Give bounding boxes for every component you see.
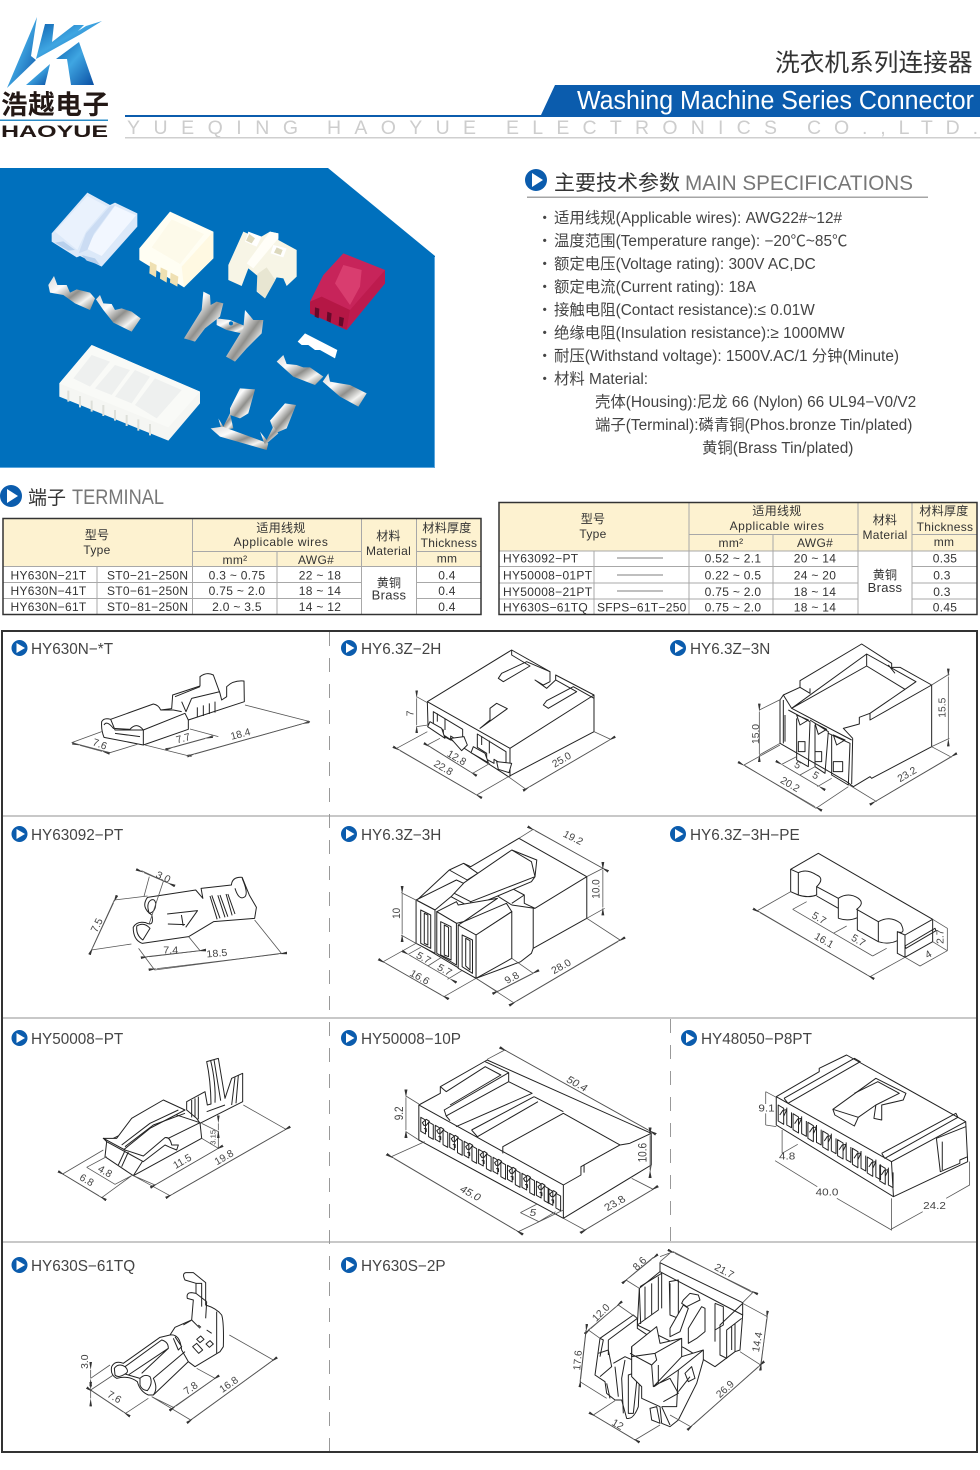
- drawing: three-way housing with dimensions: 5: [810, 770, 821, 782]
- drawing: three-way housing with dimensions: [744, 644, 952, 808]
- panel: HY6.3Z-3H-PE: [660, 818, 976, 1017]
- icon: play bullet: [12, 1257, 28, 1273]
- product photo panel: [0, 168, 435, 468]
- photo: white small bar: [298, 333, 337, 358]
- table: right terminal specifications: 0.52 ~ 2.1: [705, 552, 761, 566]
- specifications list: [537, 209, 916, 457]
- table: left terminal specifications: 22 ~ 18: [299, 568, 341, 582]
- table: right terminal specifications: 20 ~ 14: [794, 552, 836, 566]
- table: right terminal specifications: Type: [579, 527, 607, 541]
- table: right terminal specifications: 材料厚度: [919, 503, 969, 518]
- table: left terminal specifications: 0.4: [438, 584, 456, 598]
- table: left terminal specifications: 14 ~ 12: [299, 600, 341, 614]
- drawing: two-way latch housing with dimensions: [572, 1252, 767, 1440]
- table: left terminal specifications: ST0−81−250N: [107, 600, 188, 614]
- photo: white latch housing: [228, 232, 297, 298]
- table: right terminal specifications: mm: [934, 535, 954, 549]
- panel: HY6.3Z-3H: [330, 818, 656, 1017]
- part label: HY50008−PT: [31, 1031, 123, 1048]
- drawings grid frame: [2, 631, 977, 1452]
- specifications list: 额定电流(Current rating): 18A: [554, 278, 757, 296]
- drawing: cover strip with dimensions: 2.7: [936, 929, 947, 944]
- drawing: three-way housing with dimensions: 20.2: [778, 775, 801, 795]
- drawing: two-way latch housing with dimensions: 21.7: [712, 1262, 736, 1281]
- table: left terminal specifications: 0.3 ~ 0.75: [209, 568, 265, 582]
- company name strip: HAOYUE: [327, 117, 476, 139]
- table: left terminal specifications: HY630N−61T: [10, 600, 87, 614]
- drawing: three-way housing with dimensions: 15.5: [937, 697, 948, 718]
- icon: play bullet: [12, 1030, 28, 1046]
- part label: HY6.3Z−3N: [690, 641, 770, 658]
- drawing: cover strip with dimensions: 5.7: [810, 910, 828, 927]
- panel: HY630S-2P: [330, 1244, 976, 1451]
- drawing: two-way latch housing with dimensions: 8.6: [631, 1255, 649, 1273]
- header blue banner: [541, 85, 980, 115]
- table: right terminal specifications: 18 ~ 14: [794, 600, 836, 614]
- table: right terminal specifications: 0.3: [933, 585, 951, 599]
- panel: HY63092-PT: [3, 818, 329, 1017]
- table: right terminal specifications: 0.35: [933, 552, 957, 566]
- icon: play bullet: [341, 640, 357, 656]
- logo: [0, 17, 109, 141]
- logo mark: [7, 17, 102, 88]
- drawing: terminal with dimensions: 3.0: [80, 1354, 91, 1369]
- specifications list: 耐压(Withstand voltage): 1500V.AC/1 分钟(Minute): [554, 347, 899, 365]
- drawing: eight-way housing with dimensions: [758, 1055, 970, 1230]
- drawing: ten-way housing with dimensions: 23.8: [602, 1194, 628, 1214]
- header title Chinese: 洗衣机系列连接器: [775, 49, 973, 77]
- table: left terminal specifications: 适用线规: [256, 520, 306, 535]
- part label: HY630N−*T: [31, 641, 113, 658]
- table: left terminal specifications: 0.4: [438, 568, 456, 582]
- specifications title English: MAIN SPECIFICATIONS: [685, 172, 913, 195]
- drawing: terminal with dimensions: [89, 870, 281, 970]
- table: left terminal specifications: mm: [437, 552, 457, 566]
- drawing: two-way latch housing with dimensions: 17.6: [572, 1350, 585, 1371]
- specifications list: ・: [537, 325, 552, 342]
- table: right terminal specifications: HY50008−01PT: [503, 568, 593, 582]
- drawing: eight-way housing with dimensions: 40.0: [816, 1187, 838, 1198]
- specifications list: ・: [537, 233, 552, 250]
- specifications list: ・: [537, 279, 552, 296]
- panel: HY50008-PT: [3, 1020, 329, 1241]
- table: right terminal specifications: [499, 502, 977, 614]
- table: left terminal specifications: ST0−61−250N: [107, 584, 188, 598]
- drawing: terminal with dimensions: 7.4: [163, 946, 178, 956]
- banner title: Washing Machine Series Connector: [577, 87, 974, 115]
- drawing: terminal with dimensions: 3.15: [209, 1130, 218, 1145]
- drawing: three-way latch housing with dimensions: 5.7: [435, 963, 454, 979]
- specifications title Chinese: 主要技术参数: [554, 172, 680, 195]
- drawing: terminal with dimensions: 16.8: [218, 1375, 241, 1396]
- part label: HY63092−PT: [31, 827, 123, 844]
- table: left terminal specifications: mm²: [223, 553, 247, 567]
- photo: terminal pair left: [48, 276, 141, 332]
- company name strip: CO.,LTD.: [807, 117, 978, 139]
- photo: terminals on carrier strip: [211, 388, 296, 450]
- part label: HY630S−2P: [361, 1258, 446, 1275]
- icon: play bullet: [670, 826, 686, 842]
- drawing: three-way latch housing with dimensions: 10.0: [591, 879, 602, 899]
- drawing: terminal with dimensions: [72, 674, 310, 757]
- drawing: two-way latch housing with dimensions: 26.9: [715, 1379, 737, 1401]
- icon: play bullet: [12, 826, 28, 842]
- drawing: two-way housing with dimensions: 12.8: [445, 749, 468, 768]
- drawing: ten-way housing with dimensions: 50.4: [564, 1074, 590, 1094]
- table: right terminal specifications: 0.3: [933, 568, 951, 582]
- drawing: two-way housing with dimensions: 7: [405, 710, 416, 716]
- table: left terminal specifications: AWG#: [298, 553, 334, 567]
- photo: magenta housing: [310, 253, 385, 330]
- drawing: cover strip with dimensions: [757, 853, 947, 977]
- part label: HY630S−61TQ: [31, 1258, 135, 1275]
- table: left terminal specifications: 2.0 ~ 3.5: [212, 600, 262, 614]
- drawing: terminal with dimensions: 3.0: [154, 870, 172, 886]
- company name strip: [127, 117, 978, 139]
- table: left terminal specifications: 0.4: [438, 600, 456, 614]
- table: left terminal specifications: HY630N−21T: [10, 568, 87, 582]
- specifications list: 绝缘电阻(Insulation resistance):≥ 1000MW: [554, 324, 845, 342]
- specifications list: ・: [537, 302, 552, 319]
- table: right terminal specifications: 24 ~ 20: [794, 568, 836, 582]
- heading: terminal: [0, 485, 164, 509]
- specifications list: 适用线规(Applicable wires): AWG22#~12#: [554, 209, 843, 227]
- logo Chinese name: 浩越电子: [1, 83, 109, 122]
- table: left terminal specifications: 0.75 ~ 2.0: [209, 584, 265, 598]
- drawing: two-way housing with dimensions: [397, 650, 611, 795]
- table: right terminal specifications: 材料: [873, 513, 897, 527]
- drawing: eight-way housing with dimensions: 24.2: [923, 1201, 946, 1212]
- table: right terminal specifications: Brass: [868, 580, 903, 595]
- logo rule: [0, 120, 108, 121]
- drawing: eight-way housing with dimensions: 4.8: [779, 1151, 795, 1162]
- table: left terminal specifications: 黄铜: [377, 575, 401, 590]
- drawing: terminal with dimensions: 7.7: [175, 732, 192, 746]
- table: left terminal specifications: Material: [366, 544, 411, 558]
- specifications list: 温度范围(Temperature range): −20℃~85℃: [554, 232, 847, 250]
- drawing: terminal with dimensions: 18.5: [206, 948, 228, 960]
- table: left terminal specifications: [3, 518, 481, 614]
- drawing: three-way housing with dimensions: 5: [792, 760, 803, 772]
- table: right terminal specifications: Material: [862, 528, 908, 542]
- drawing: three-way latch housing with dimensions: 10: [392, 908, 403, 919]
- drawing: two-way latch housing with dimensions: 12: [610, 1418, 625, 1433]
- drawing: three-way housing with dimensions: 23.2: [896, 765, 919, 785]
- drawing: three-way latch housing with dimensions: 19.2: [561, 829, 585, 848]
- table: left terminal specifications: Brass: [372, 588, 407, 602]
- part label: HY48050−P8PT: [701, 1031, 812, 1048]
- icon: play bullet: [670, 640, 686, 656]
- table: right terminal specifications: 型号: [581, 512, 605, 526]
- drawing: terminal with dimensions: [80, 1273, 273, 1420]
- drawing: two-way latch housing with dimensions: 14.4: [751, 1331, 765, 1353]
- part label: HY50008−10P: [361, 1031, 461, 1048]
- table: left terminal specifications: 型号: [85, 528, 109, 542]
- drawing: cover strip with dimensions: 4: [924, 949, 934, 961]
- icon: play bullet: [12, 640, 28, 656]
- drawing: terminal with dimensions: 7.6: [105, 1389, 123, 1406]
- drawing: three-way housing with dimensions: 15.0: [751, 724, 762, 744]
- specifications list: 端子(Terminal):磷青铜(Phos.bronze Tin/plated): [595, 416, 912, 434]
- table: left terminal specifications: 材料厚度: [422, 520, 472, 535]
- panel: HY630N-*T: [3, 632, 329, 816]
- specifications list: 额定电压(Voltage rating): 300V AC,DC: [554, 255, 816, 273]
- specifications list: 材料 Material:: [554, 370, 648, 388]
- drawing: two-way latch housing with dimensions: 12.0: [591, 1302, 613, 1324]
- company name strip: YUEQING: [127, 117, 298, 139]
- specifications list: ・: [537, 371, 552, 388]
- photo: translucent two-way housing: [52, 193, 137, 267]
- table: right terminal specifications: SFPS−61T−250: [597, 600, 687, 614]
- drawing: terminal with dimensions: 6.8: [77, 1172, 95, 1189]
- table: left terminal specifications: Applicable wires: [234, 535, 328, 549]
- drawing: two-way housing with dimensions: 22.8: [431, 759, 455, 778]
- photo: cream three-way housing: [139, 212, 213, 287]
- table: right terminal specifications: HY50008−21PT: [503, 585, 593, 599]
- icon: play bullet: [0, 485, 22, 507]
- table: right terminal specifications: 18 ~ 14: [794, 585, 836, 599]
- drawing: terminal with dimensions: 4.8: [96, 1164, 114, 1181]
- heading: main specifications: [525, 169, 913, 195]
- table: right terminal specifications: HY630S−61TQ: [503, 600, 588, 614]
- part label: HY6.3Z−3H: [361, 827, 441, 844]
- table: left terminal specifications: HY630N−41T: [10, 584, 87, 598]
- specifications list: 黄铜(Brass Tin/plated): [702, 439, 853, 457]
- table: right terminal specifications: 适用线规: [752, 503, 802, 518]
- company name strip: ELECTRONICS: [506, 117, 777, 139]
- part label: HY6.3Z−2H: [361, 641, 441, 658]
- table: left terminal specifications: Type: [83, 543, 111, 557]
- drawing: terminal with dimensions: 7.6: [91, 737, 108, 753]
- photo: long ten-way housing: [59, 345, 200, 441]
- table: left terminal specifications: 18 ~ 14: [299, 584, 341, 598]
- icon: play bullet: [525, 169, 547, 191]
- icon: play bullet: [341, 826, 357, 842]
- drawing: terminal with dimensions: 7.8: [182, 1380, 200, 1398]
- specifications list: 接触电阻(Contact resistance):≤ 0.01W: [554, 301, 815, 319]
- drawing: ten-way housing with dimensions: 10.6: [637, 1143, 650, 1162]
- photo: terminal pair centre: [184, 292, 263, 362]
- drawing: terminal with dimensions: 19.8: [213, 1148, 236, 1168]
- panel: HY6.3Z-3N: [660, 632, 976, 816]
- drawing: ten-way housing with dimensions: 9.2: [393, 1106, 406, 1120]
- drawing: three-way latch housing with dimensions: [383, 829, 620, 1003]
- drawing: three-way latch housing with dimensions: 9.8: [503, 970, 522, 987]
- drawing: cover strip with dimensions: 5.7: [849, 933, 867, 950]
- table: right terminal specifications: Applicable wires: [730, 519, 824, 533]
- table: right terminal specifications: AWG#: [797, 536, 833, 550]
- terminal title Chinese: 端子: [28, 487, 66, 509]
- drawing: three-way latch housing with dimensions: 28.0: [550, 958, 574, 977]
- table: left terminal specifications: Thickness: [421, 536, 477, 550]
- specifications list: 壳体(Housing):尼龙 66 (Nylon) 66 UL94−V0/V2: [595, 393, 916, 411]
- panel: HY48050-P8PT: [672, 1020, 976, 1241]
- specifications list: ・: [537, 256, 552, 273]
- drawing: ten-way housing with dimensions: [391, 1050, 653, 1232]
- table: right terminal specifications: 黄铜: [873, 567, 897, 582]
- table: right terminal specifications: HY63092−PT: [503, 552, 579, 566]
- logo English name: HAOYUE: [1, 122, 108, 141]
- drawing: three-way latch housing with dimensions: 16.6: [407, 968, 431, 987]
- panel: HY630S-61TQ: [3, 1244, 329, 1451]
- drawing: cover strip with dimensions: 16.1: [812, 931, 835, 951]
- icon: play bullet: [341, 1030, 357, 1046]
- table: right terminal specifications: mm²: [719, 536, 743, 550]
- part label: HY6.3Z−3H−PE: [690, 827, 800, 844]
- table: right terminal specifications: 0.75 ~ 2.0: [705, 585, 761, 599]
- drawing: terminal with dimensions: 11.5: [172, 1152, 194, 1172]
- table: left terminal specifications: 材料: [376, 529, 401, 543]
- drawing: terminal with dimensions: 18.4: [230, 727, 252, 743]
- panel: HY50008-10P: [330, 1020, 670, 1241]
- photo: terminal pair right: [277, 355, 367, 407]
- table: left terminal specifications: ST0−21−250N: [107, 568, 188, 582]
- table: right terminal specifications: Thickness: [917, 520, 973, 534]
- drawing: terminal with dimensions: [63, 1058, 286, 1198]
- icon: play bullet: [341, 1257, 357, 1273]
- drawing: ten-way housing with dimensions: 5: [530, 1208, 537, 1219]
- drawing: two-way housing with dimensions: 25.0: [551, 751, 574, 770]
- table: right terminal specifications: 0.22 ~ 0.5: [705, 568, 761, 582]
- drawing: three-way latch housing with dimensions: 5.7: [414, 951, 433, 967]
- specifications list: ・: [537, 210, 552, 227]
- table: right terminal specifications: 0.75 ~ 2.0: [705, 600, 761, 614]
- panel: HY6.3Z-2H: [330, 632, 656, 816]
- drawing: terminal with dimensions: 7.5: [89, 917, 106, 934]
- drawing: eight-way housing with dimensions: 9.1: [758, 1103, 775, 1114]
- icon: play bullet: [681, 1030, 697, 1046]
- terminal title English: TERMINAL: [72, 486, 164, 509]
- table: right terminal specifications: 0.45: [933, 600, 957, 614]
- drawing: ten-way housing with dimensions: 45.0: [457, 1184, 483, 1204]
- specifications list: ・: [537, 348, 552, 365]
